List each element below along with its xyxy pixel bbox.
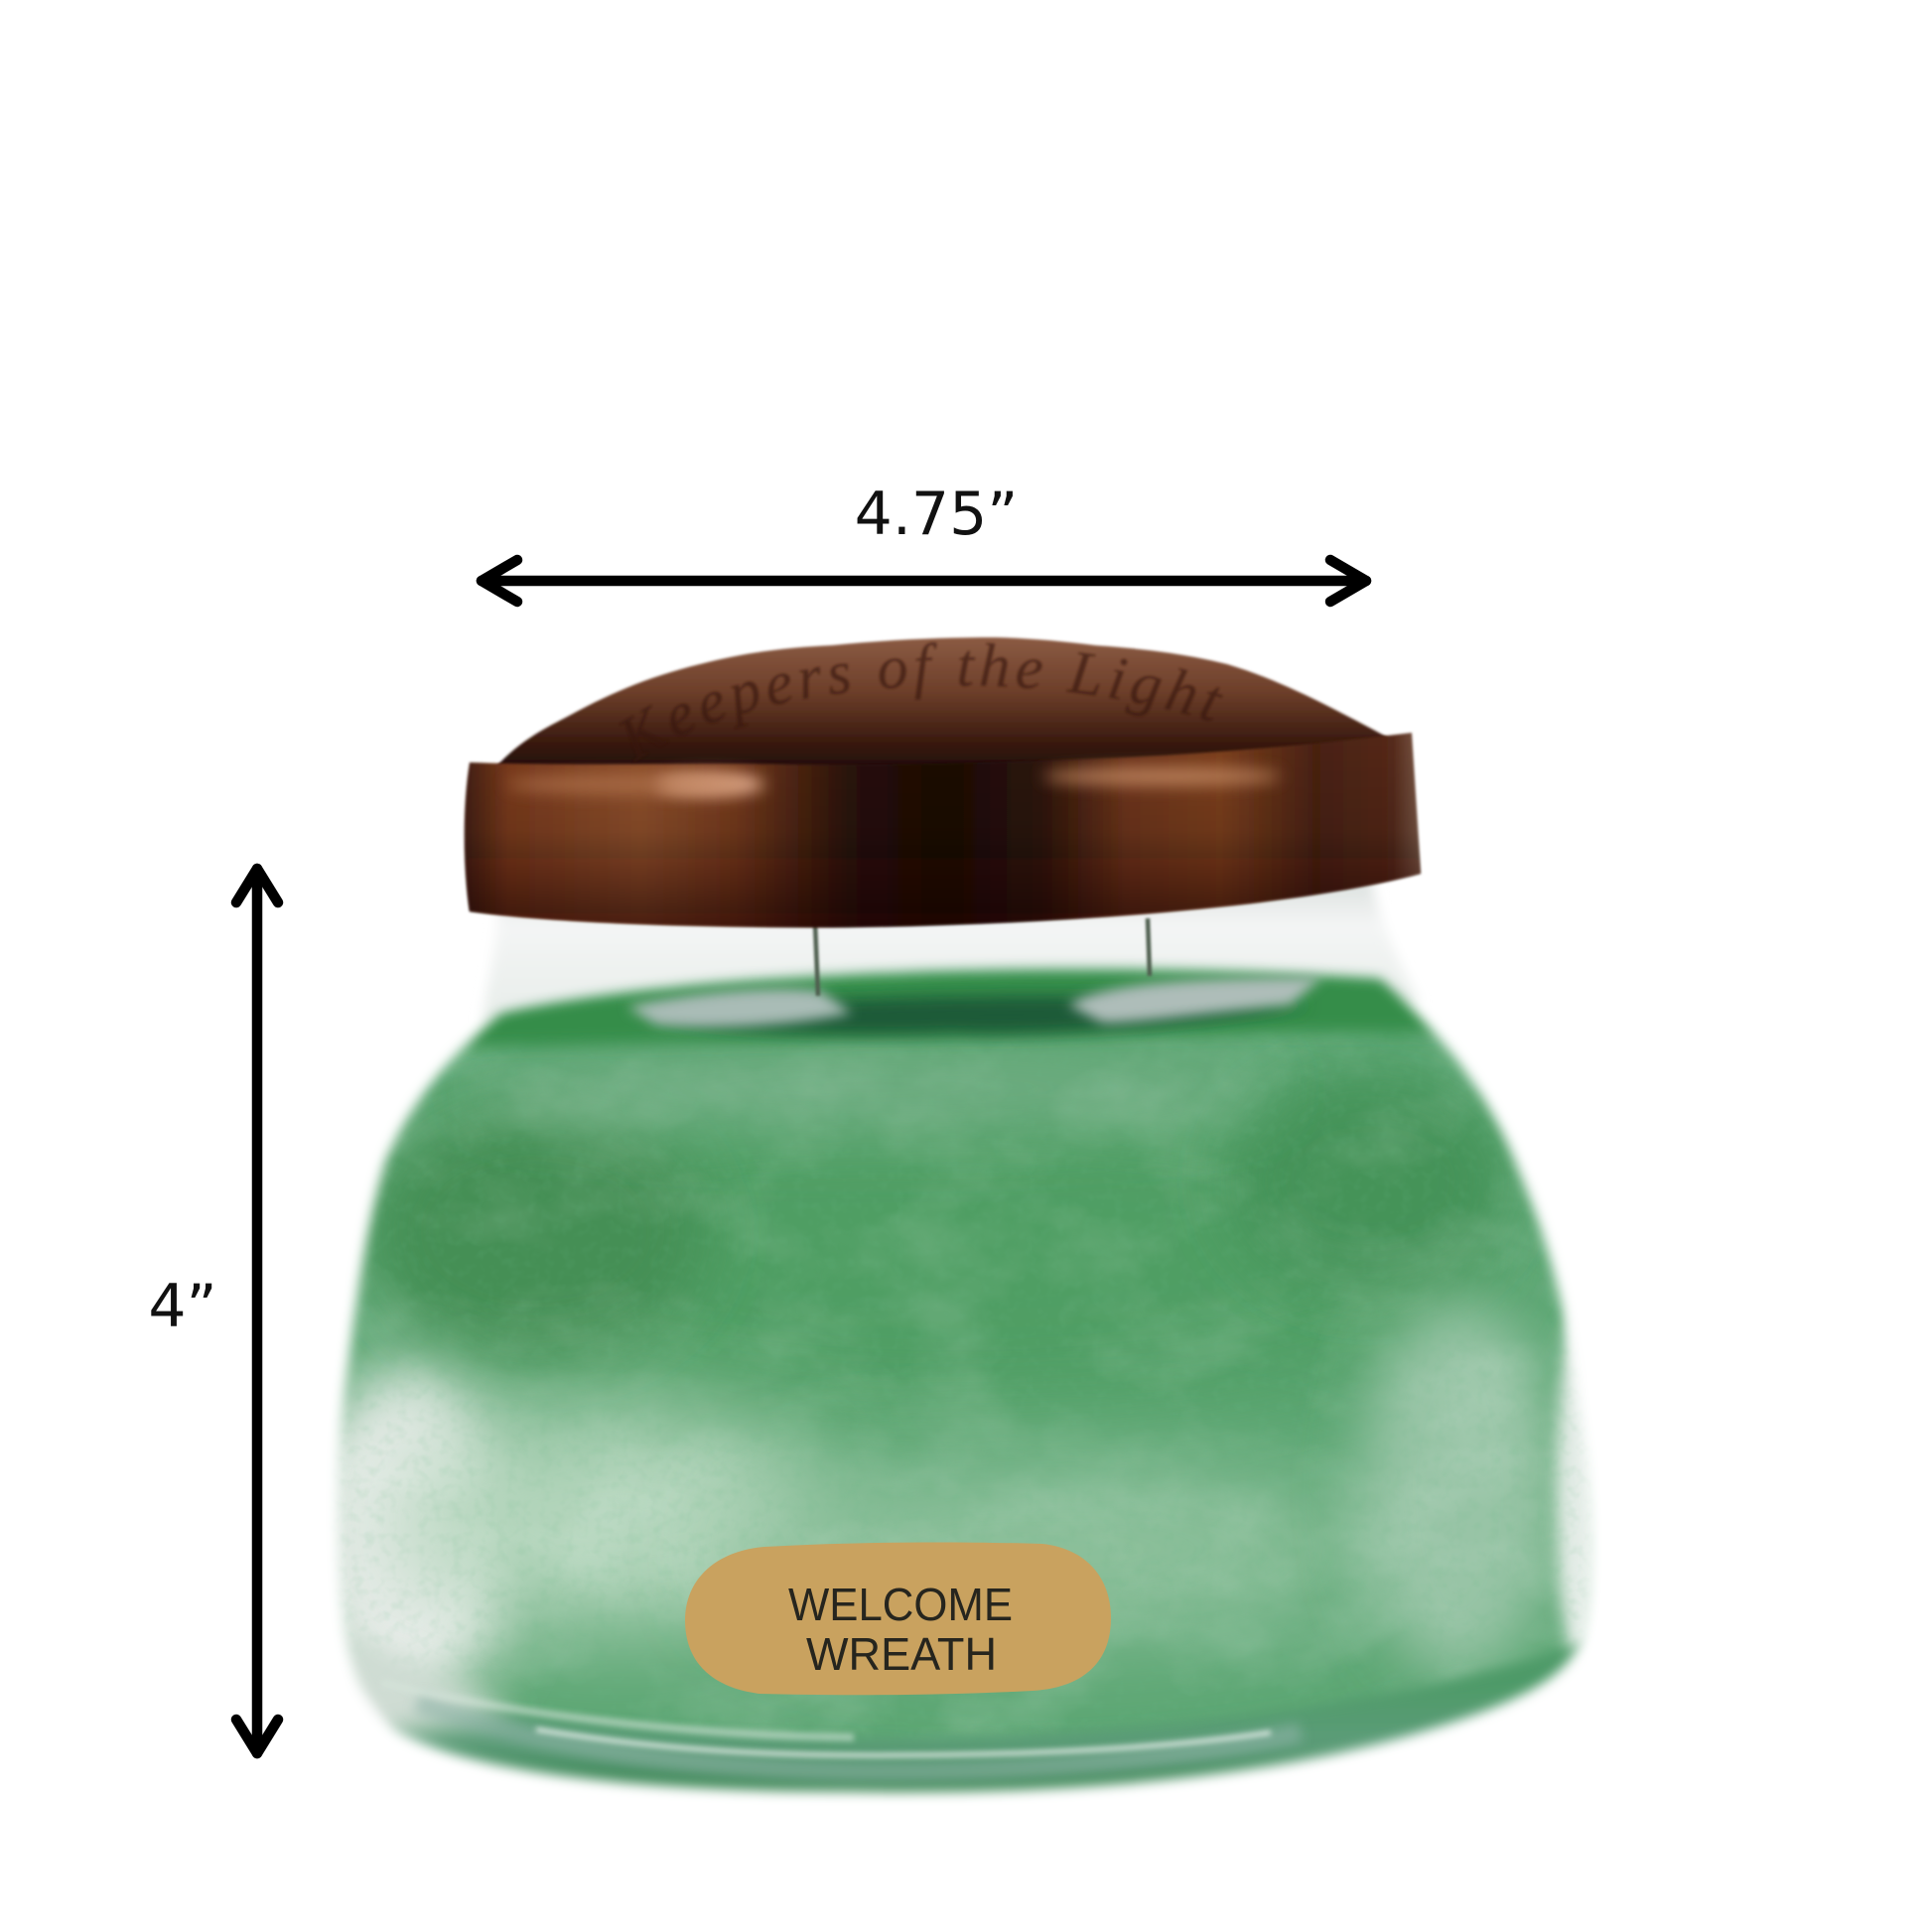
lid dome bbox=[496, 635, 1388, 766]
width dimension label: 4.75” bbox=[855, 480, 1018, 549]
infographic: candle jar with dimensions bbox=[151, 490, 1596, 1801]
product label bbox=[685, 1542, 1111, 1695]
width arrow bbox=[482, 560, 1366, 602]
candle jar bbox=[333, 635, 1596, 1801]
glass neck bbox=[482, 879, 1420, 1023]
embossed lid lettering: Keepers of the Light bbox=[620, 641, 1223, 735]
lid band bbox=[465, 733, 1421, 927]
label text: WELCOME bbox=[788, 1579, 1013, 1630]
glass base bbox=[401, 1636, 1586, 1797]
height arrow bbox=[236, 869, 278, 1753]
wax body bbox=[298, 943, 1628, 1817]
wax melt pools bbox=[627, 977, 1322, 1028]
height dimension label: 4” bbox=[148, 1272, 217, 1341]
product label: WREATH bbox=[806, 1628, 997, 1680]
wicks bbox=[815, 918, 1150, 996]
candle top surface bbox=[467, 969, 1440, 1047]
